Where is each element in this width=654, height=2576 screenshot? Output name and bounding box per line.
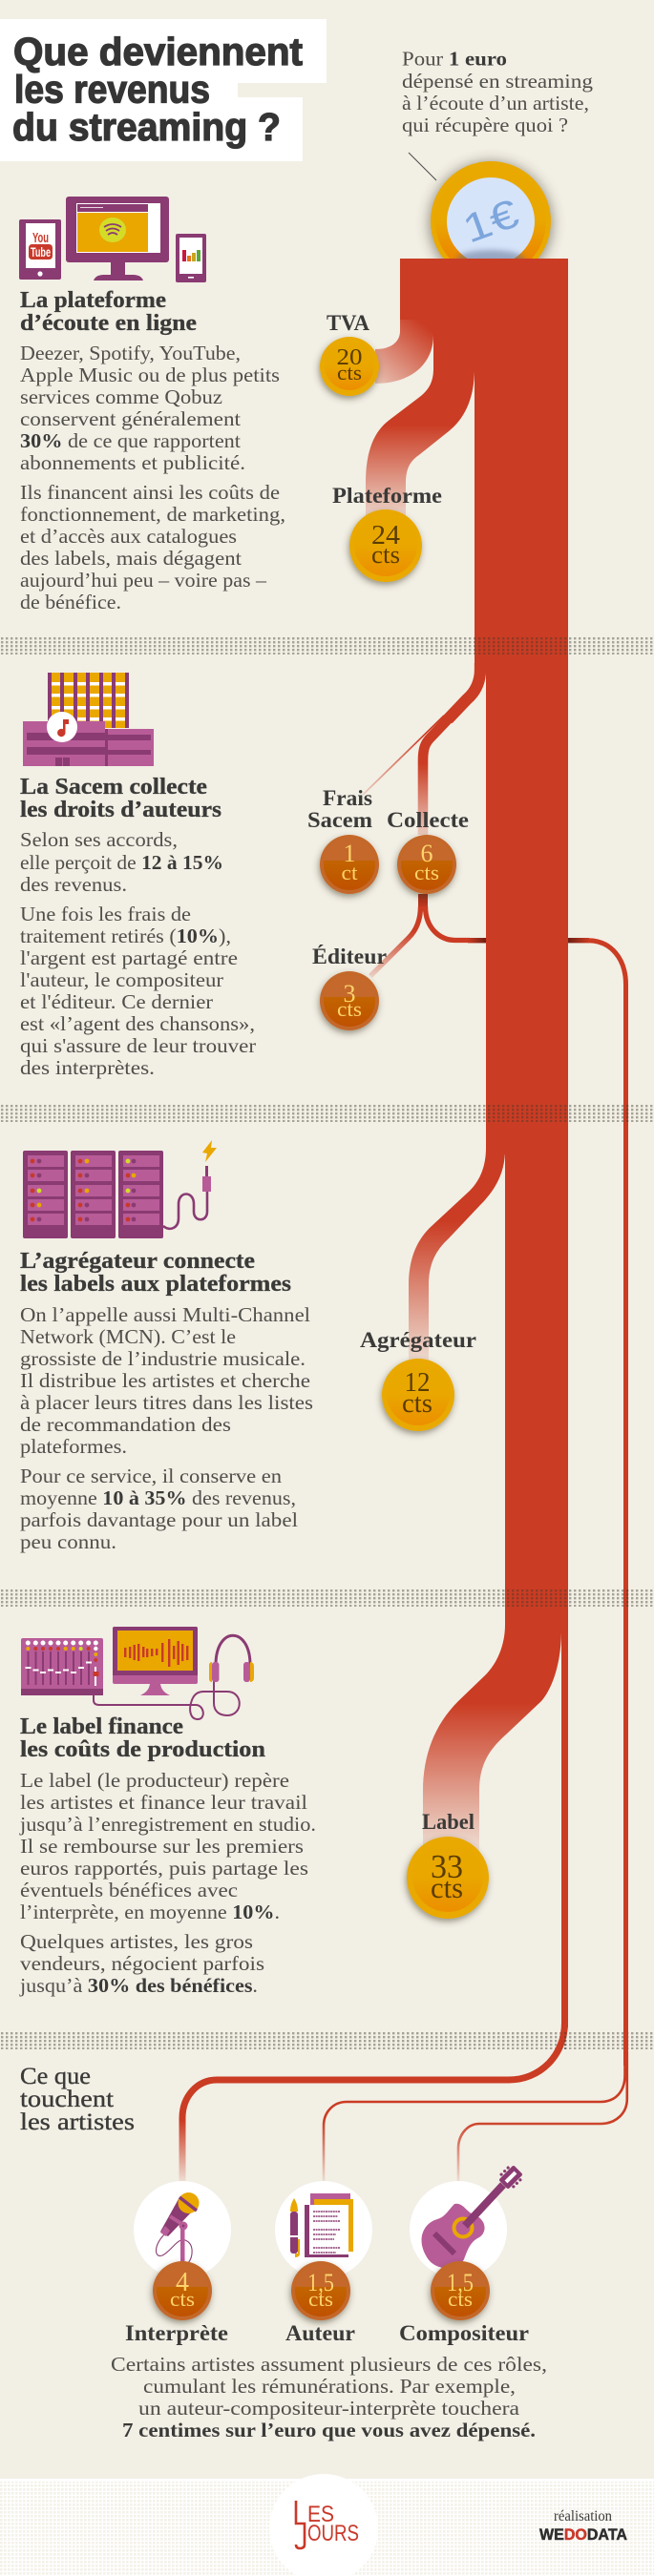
closing note: Certains artistes assument plusieurs de ces rôles,: [111, 2353, 547, 2376]
heading: les droits d’auteurs: [20, 798, 222, 822]
body text: euros rapportés, puis partage les: [20, 1857, 308, 1880]
body text: Deezer, Spotify, YouTube,: [20, 342, 241, 364]
coin: 1,5 cts: cts: [308, 2287, 333, 2311]
body text: services comme Qobuz: [20, 385, 222, 408]
body text: de recommandation des: [20, 1413, 231, 1436]
footer: [0, 2474, 654, 2576]
coin: 1 ct: ct: [342, 861, 357, 884]
heading: Le label finance: [20, 1714, 183, 1739]
coin: 24 cts: [349, 509, 422, 582]
coin: 3 cts: 3: [344, 980, 355, 1008]
label: Collecte: Collecte: [387, 808, 469, 832]
body text: Selon ses accords,: [20, 828, 178, 851]
heading: [20, 1249, 291, 1297]
coin: 1 ct: 1: [344, 840, 355, 867]
coin: 12 cts: [382, 1359, 454, 1431]
body text: des revenus.: [20, 873, 127, 896]
body text: abonnements et publicité.: [20, 451, 245, 474]
body text: Network (MCN). C’est le: [20, 1325, 236, 1348]
coin: 12 cts: cts: [402, 1389, 432, 1419]
heading: La plateforme: [20, 288, 166, 313]
artist: interprète: [125, 2181, 231, 2345]
heading: L’agrégateur connecte: [20, 1249, 255, 1274]
flow: collecte to artists, left: [426, 906, 470, 941]
credit: réalisation Wedodata: réalisation: [554, 2508, 612, 2524]
flow: Sacem: [448, 663, 480, 719]
label: Compositeur: [399, 2321, 529, 2345]
flow: auteur: [324, 2051, 624, 2183]
heading: La Sacem collecte: [20, 775, 207, 800]
flow: frais Sacem: [363, 716, 444, 795]
flow: interprète: [182, 2023, 565, 2183]
label: Label: Label: [422, 1810, 475, 1834]
label: Agrégateur: Agrégateur: [360, 1328, 476, 1352]
label: Interprète: [125, 2321, 228, 2345]
coin: 1,5 cts: cts: [448, 2287, 473, 2311]
coin: 20 cts: [320, 337, 379, 396]
coin: 20 cts: 20: [336, 345, 363, 370]
artist: compositeur: [399, 2163, 529, 2345]
icon: Sacem building: [23, 673, 154, 766]
intro question: à l’écoute d’un artiste,: [402, 92, 589, 114]
heading: ce que touchent les artistes: [20, 2064, 135, 2135]
body text: Le label (le producteur) repère: [20, 1769, 289, 1792]
artist: auteur: [275, 2181, 372, 2345]
label: Auteur: [285, 2321, 355, 2345]
body text: [19, 1769, 316, 1997]
heading: les labels aux plateformes: [20, 1272, 291, 1297]
heading: les coûts de production: [20, 1737, 265, 1762]
closing note: 7 centimes sur l’euro que vous avez dépensé.: [122, 2419, 536, 2441]
label: Plateforme: Plateforme: [332, 484, 442, 508]
closing note: cumulant les rémunérations. Par exemple,: [143, 2375, 516, 2398]
body text: plateformes.: [20, 1435, 127, 1458]
coin: 4 cts: 4: [176, 2268, 189, 2297]
icon: 1 euro coin: 1€: [457, 191, 524, 252]
coin: 24 cts: cts: [371, 541, 400, 569]
pointer line: [409, 153, 436, 180]
coin: 6 cts: [397, 835, 456, 894]
body text: [20, 828, 256, 1079]
coin: 3 cts: [320, 971, 379, 1030]
body text: peu connu.: [20, 1530, 116, 1553]
coin: 6 cts: cts: [414, 861, 439, 884]
coin: 33 cts: 33: [431, 1848, 463, 1885]
body text: l'argent est partagé entre: [20, 946, 238, 969]
body text: grossiste de l’industrie musicale.: [20, 1347, 306, 1370]
body text: On l’appelle aussi Multi-Channel: [20, 1303, 310, 1326]
coin: 1,5 cts: [291, 2261, 350, 2320]
coin: 1,5 cts: [431, 2261, 490, 2320]
body text: fonctionnement, de marketing,: [20, 503, 285, 526]
body text: Apple Music ou de plus petits: [20, 364, 280, 386]
closing note: un auteur-compositeur-interprète touchera: [138, 2397, 519, 2420]
body text: [20, 1303, 313, 1553]
coin: 1,5 cts: 1,5: [307, 2269, 334, 2296]
body text: elle perçoit de 12 à 15%: [20, 851, 223, 874]
heading: [20, 288, 197, 336]
heading: ce que touchent les artistes: les artistes: [20, 2109, 135, 2135]
coin: 20 cts: cts: [337, 361, 362, 384]
title: les revenus: [14, 67, 210, 111]
body text: parfois davantage pour un label: [20, 1508, 298, 1531]
credit: réalisation Wedodata: WEDODATA: [539, 2526, 627, 2544]
flow: éditeur: [370, 906, 420, 976]
body text: est «l’agent des chansons»,: [20, 1012, 255, 1035]
flow: collecte: [423, 717, 450, 835]
heading: ce que touchent les artistes: Ce que: [20, 2064, 91, 2089]
body text: [20, 342, 285, 613]
flow: TVA: [375, 317, 433, 384]
icon: server racks: [23, 1140, 217, 1238]
body text: à placer leurs titres dans les listes: [20, 1391, 313, 1414]
body text: jusqu’à l’enregistrement en studio.: [19, 1813, 316, 1836]
dotted separators: [0, 637, 654, 2049]
intro question: Pour 1 euro: [402, 48, 507, 71]
coin: 4 cts: cts: [170, 2287, 195, 2311]
body text: et d’accès aux catalogues: [20, 525, 237, 548]
title: [0, 19, 327, 161]
body text: Pour ce service, il conserve en: [20, 1465, 282, 1487]
body text: Une fois les frais de: [20, 903, 191, 925]
body text: des labels, mais dégagent: [20, 547, 242, 570]
coin: 1,5 cts: 1,5: [447, 2269, 474, 2296]
coin: 33 cts: [407, 1837, 489, 1919]
heading: [20, 775, 222, 822]
sankey flow: revenue streams: [182, 259, 627, 2183]
body text: éventuels bénéfices avec: [20, 1879, 238, 1901]
body text: Quelques artistes, les gros: [20, 1930, 253, 1953]
label: TVA: TVA: [327, 311, 369, 335]
panel: plateforme d'écoute: [19, 197, 285, 613]
body text: Ils financent ainsi les coûts de: [20, 481, 280, 504]
body text: des interprètes.: [20, 1056, 155, 1079]
logo: Les Jours: [296, 2501, 359, 2548]
body text: l'auteur, le compositeur: [20, 968, 223, 991]
flow: agrégateur: [409, 1140, 505, 1374]
logo: Les Jours: ES: [307, 2502, 334, 2527]
coin: 33 cts: cts: [431, 1871, 463, 1904]
intro question: qui récupère quoi ?: [402, 114, 568, 136]
main trunk: [400, 259, 568, 2027]
label: Éditeur: Éditeur: [312, 945, 387, 968]
flow: collecte to artists, right: [568, 938, 589, 943]
panel: Sacem: [20, 673, 256, 1079]
dots over the flows: [475, 637, 628, 2049]
coin: 3 cts: cts: [337, 997, 362, 1021]
title: Que deviennent: [13, 30, 303, 73]
icon: devices: You: [32, 230, 49, 246]
body text: 30% de ce que rapportent: [20, 429, 241, 452]
heading: ce que touchent les artistes: touchent: [20, 2087, 114, 2112]
body text: Il distribue les artistes et cherche: [20, 1369, 310, 1392]
panel: label: [19, 1627, 316, 1997]
body text: et l'éditeur. Ce dernier: [20, 990, 213, 1013]
flow: collecte stem: [418, 894, 428, 911]
body text: l’interprète, en moyenne 10%.: [20, 1901, 280, 1923]
coin: 24 cts: 24: [371, 520, 401, 551]
flow: label: [423, 1617, 561, 1856]
title: du streaming ?: [12, 105, 281, 149]
body text: les artistes et finance leur travail: [20, 1791, 307, 1814]
credit: réalisation Wedodata: [539, 2508, 627, 2544]
icon: devices: Tube: [31, 244, 51, 260]
heading: d’écoute en ligne: [20, 311, 197, 336]
icon: 1 euro coin: [430, 161, 552, 284]
icon: devices: [19, 197, 206, 282]
coin: 1 ct: [320, 835, 379, 894]
label: Frais Sacem: [307, 786, 372, 832]
intro question: dépensé en streaming: [402, 70, 593, 93]
flow: plateforme: [366, 339, 475, 520]
intro question: [402, 48, 593, 136]
coin: 12 cts: 12: [405, 1367, 430, 1398]
closing note: [111, 2353, 547, 2441]
icon: studio mixer, monitor and headphones: [21, 1627, 254, 1719]
coin: 6 cts: 6: [420, 840, 433, 867]
logo: Les Jours: OURS: [307, 2521, 359, 2546]
body text: de bénéfice.: [20, 591, 121, 613]
body text: traitement retirés (10%),: [20, 924, 231, 947]
body text: vendeurs, négocient parfois: [20, 1952, 264, 1975]
body text: aujourd’hui peu – voire pas –: [20, 569, 266, 592]
body text: conservent généralement: [20, 407, 241, 430]
body text: Il se rembourse sur les premiers: [20, 1835, 304, 1858]
flow: compositeur: [458, 2051, 627, 2183]
body text: jusqu’à 30% des bénéfices.: [19, 1974, 258, 1997]
label: Frais Sacem: Frais: [323, 786, 372, 810]
coin: 4 cts: [153, 2261, 212, 2320]
heading: [20, 1714, 265, 1762]
icon: microphone: [157, 2192, 199, 2263]
panel: agrégateur: [20, 1140, 313, 1553]
label: Frais Sacem: Sacem: [307, 808, 372, 832]
icon: guitar: [422, 2163, 525, 2268]
body text: moyenne 10 à 35% des revenus,: [20, 1486, 296, 1509]
body text: qui s'assure de leur trouver: [20, 1034, 256, 1057]
icon: sheets and pen: [290, 2193, 353, 2257]
